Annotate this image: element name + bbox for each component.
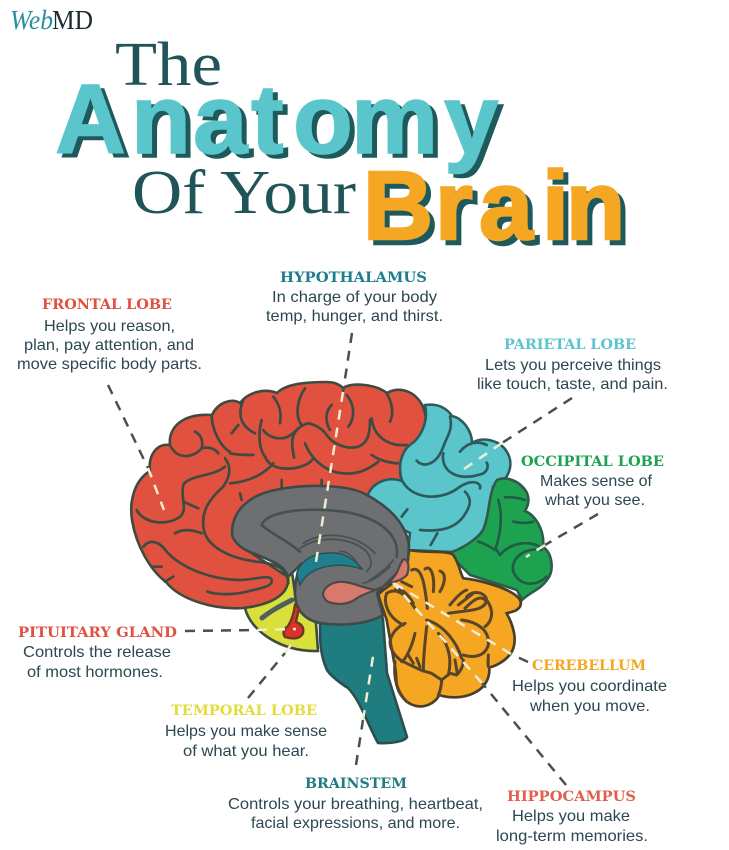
label: cerebellum: CEREBELLUM [532, 658, 646, 674]
label: parietal lobe: like touch, taste, and pain. [477, 376, 668, 393]
label: brainstem [228, 776, 483, 832]
label: frontal lobe: move specific body parts. [17, 356, 202, 373]
label: brainstem: BRAINSTEM [305, 776, 407, 792]
brain illustration [131, 382, 552, 743]
title: Anatomy [55, 64, 499, 174]
pituitary stalk and gland [262, 600, 303, 638]
label: hippocampus: Helps you make [512, 808, 630, 825]
label: parietal lobe: Lets you perceive things [485, 357, 661, 374]
label: frontal lobe: Helps you reason, [44, 318, 175, 335]
label: brainstem: facial expressions, and more. [251, 815, 460, 832]
label: hypothalamus: In charge of your body [272, 289, 437, 306]
frontal lobe folds, top part [230, 388, 407, 500]
label: temporal lobe: TEMPORAL LOBE [171, 703, 317, 719]
corpus callosum folds [262, 510, 397, 583]
label: brainstem: Controls your breathing, heartbeat, [228, 796, 483, 813]
label: occipital lobe: OCCIPITAL LOBE [521, 454, 664, 470]
label: hypothalamus: temp, hunger, and thirst. [266, 308, 443, 325]
label: pituitary gland [18, 625, 177, 681]
label: cerebellum [512, 658, 667, 715]
corpus callosum and thalamus [232, 486, 409, 625]
label: occipital lobe: Makes sense of [540, 473, 653, 490]
title [55, 31, 630, 265]
ventricle [297, 553, 362, 585]
temporal lobe region [245, 572, 318, 651]
label: occipital lobe [521, 454, 664, 509]
label: temporal lobe: Helps you make sense [165, 723, 327, 740]
label: cerebellum: Helps you coordinate [512, 678, 667, 695]
label: pituitary gland: PITUITARY GLAND [18, 625, 177, 641]
logo: WebMD [10, 5, 93, 35]
label: parietal lobe: PARIETAL LOBE [504, 337, 636, 353]
label: frontal lobe [17, 297, 202, 373]
cerebellum folds [386, 568, 492, 702]
logo: WebMD: Web [10, 5, 53, 35]
label: occipital lobe: what you see. [544, 492, 645, 509]
label: temporal lobe [165, 703, 327, 760]
frontal lobe [131, 382, 426, 608]
label: temporal lobe: of what you hear. [183, 743, 309, 760]
title: Anatomy [60, 68, 504, 178]
parietal lobe [367, 405, 510, 552]
title: Brain [363, 151, 625, 260]
title: The [115, 31, 222, 99]
label: cerebellum: when you move. [529, 698, 650, 715]
brainstem [320, 593, 407, 743]
occipital lobe [450, 479, 552, 600]
label: hippocampus [496, 789, 648, 845]
occipital lobe folds [478, 497, 547, 584]
dashed leader lines [108, 333, 598, 785]
label: hippocampus: long-term memories. [496, 828, 648, 845]
label: hippocampus: HIPPOCAMPUS [507, 789, 636, 805]
parietal lobe folds [400, 417, 488, 545]
hippocampus [323, 559, 408, 604]
label: hypothalamus: HYPOTHALAMUS [280, 270, 427, 286]
frontal lobe folds, left part [137, 415, 288, 594]
label: frontal lobe: FRONTAL LOBE [42, 297, 172, 313]
cerebellum [378, 550, 521, 706]
label: frontal lobe: plan, pay attention, and [24, 337, 194, 354]
label: pituitary gland: Controls the release [23, 644, 171, 661]
label: pituitary gland: of most hormones. [27, 664, 163, 681]
label: parietal lobe [477, 337, 668, 393]
title: Of Your [132, 159, 356, 227]
title: Brain [368, 156, 630, 265]
label: hypothalamus [266, 270, 443, 325]
logo: WebMD: MD [52, 5, 93, 35]
